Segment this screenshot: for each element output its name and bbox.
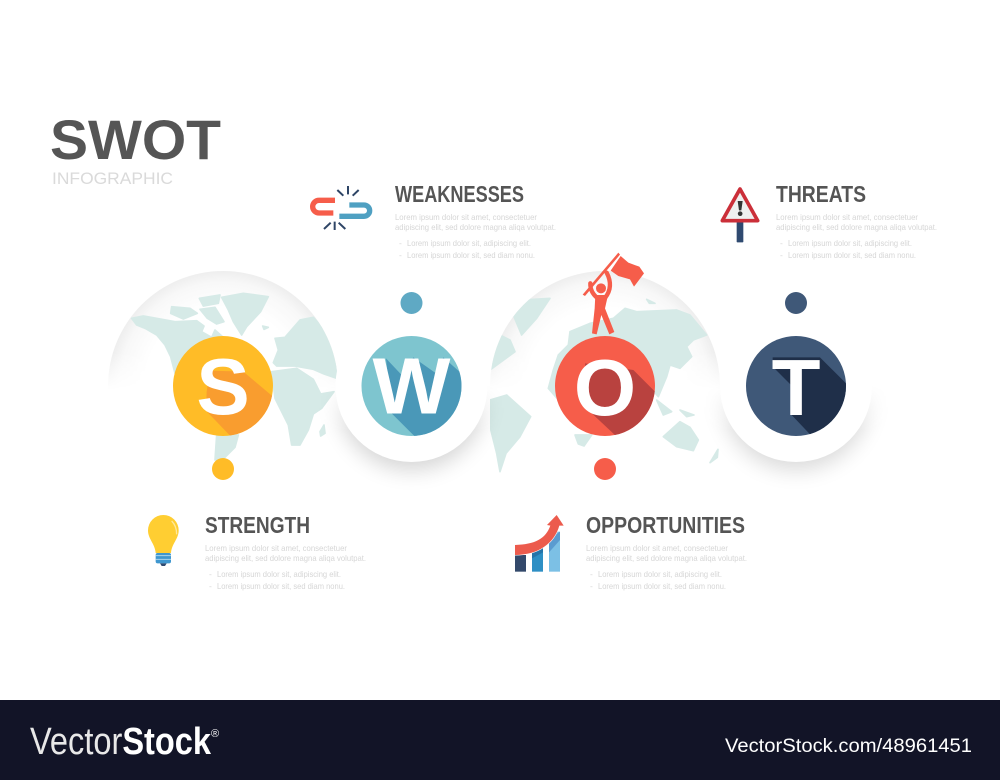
footer bar — [0, 700, 1000, 780]
text block — [205, 543, 366, 591]
O badge — [555, 336, 657, 438]
panel: threats — [722, 181, 937, 260]
W badge — [362, 336, 465, 438]
W white backing — [336, 310, 488, 462]
text block: - — [209, 569, 212, 579]
icon: person with flag — [583, 253, 644, 334]
icon: growth chart — [515, 515, 564, 572]
text block: Lorem ipsum dolor sit, sed diam nonu. — [217, 581, 345, 591]
S badge — [173, 336, 275, 440]
world map left — [132, 293, 337, 460]
text block: - — [399, 238, 402, 248]
dome behind S — [110, 271, 318, 371]
title: SWOT — [50, 108, 221, 171]
T white backing — [720, 310, 872, 462]
T circle shadow — [720, 407, 872, 477]
heading: STRENGTH — [205, 512, 310, 538]
panel: opportunities — [515, 512, 747, 591]
registered mark: ® — [211, 728, 219, 740]
S badge: S — [196, 342, 250, 431]
text block: Lorem ipsum dolor sit amet, consectetuer — [776, 212, 918, 222]
text block — [586, 543, 747, 591]
heading: THREATS — [776, 181, 866, 207]
text block: Lorem ipsum dolor sit, adipiscing elit. — [407, 238, 531, 248]
panel: strength — [148, 512, 366, 591]
text block: Lorem ipsum dolor sit, adipiscing elit. — [598, 569, 722, 579]
text block: Lorem ipsum dolor sit, sed diam nonu. — [407, 250, 535, 260]
text block: Lorem ipsum dolor sit, sed diam nonu. — [598, 581, 726, 591]
text block: Lorem ipsum dolor sit, adipiscing elit. — [788, 238, 912, 248]
heading: OPPORTUNITIES — [586, 512, 745, 538]
W circle shadow — [334, 405, 488, 478]
text block: - — [590, 569, 593, 579]
text block: adipiscing elit, sed dolore magna aliqa volutpat. — [586, 553, 747, 563]
icon: light bulb — [148, 515, 179, 566]
text block: Lorem ipsum dolor sit amet, consectetuer — [395, 212, 537, 222]
text block: adipiscing elit, sed dolore magna aliqa volutpat. — [205, 553, 366, 563]
text block — [395, 212, 556, 260]
text block: - — [590, 581, 593, 591]
text block: adipiscing elit, sed dolore magna aliqa volutpat. — [395, 222, 556, 232]
dot: W — [400, 292, 422, 314]
world map right — [490, 298, 718, 472]
text block: - — [399, 250, 402, 260]
footer id: VectorStock.com/48961451 — [725, 736, 972, 757]
W badge: W — [372, 342, 451, 430]
panel: wave with world map — [110, 271, 872, 478]
text block — [776, 212, 937, 260]
dot: O — [594, 458, 616, 480]
dome behind O — [492, 271, 718, 370]
footer logo: VectorStock — [30, 721, 212, 763]
text block: Lorem ipsum dolor sit, sed diam nonu. — [788, 250, 916, 260]
title: INFOGRAPHIC — [52, 170, 173, 188]
O badge: O — [574, 343, 636, 432]
icon: broken chain — [313, 186, 370, 230]
T badge: T — [772, 343, 821, 432]
text block: Lorem ipsum dolor sit amet, consectetuer — [586, 543, 728, 553]
text block: - — [209, 581, 212, 591]
T badge — [746, 336, 848, 436]
icon: warning sign — [722, 189, 758, 242]
text block: - — [780, 250, 783, 260]
text block: - — [780, 238, 783, 248]
dot: S — [212, 458, 234, 480]
dot: T — [785, 292, 807, 314]
heading: WEAKNESSES — [395, 181, 524, 207]
text block: Lorem ipsum dolor sit amet, consectetuer — [205, 543, 347, 553]
text block: Lorem ipsum dolor sit, adipiscing elit. — [217, 569, 341, 579]
text block: adipiscing elit, sed dolore magna aliqa volutpat. — [776, 222, 937, 232]
panel: weaknesses — [313, 181, 556, 260]
